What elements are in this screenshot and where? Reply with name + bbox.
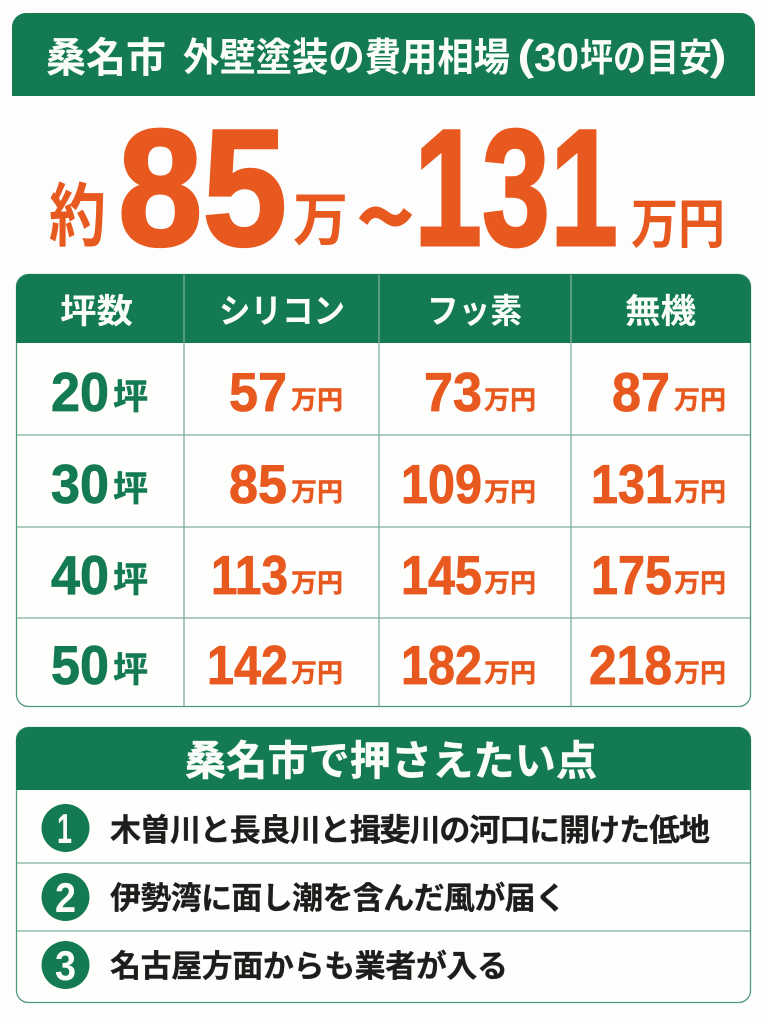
- row: 50坪: 142: [207, 634, 288, 696]
- row: 40坪: 万円: [674, 563, 726, 600]
- row: 40坪: [51, 544, 726, 606]
- price range headline: 万: [293, 173, 348, 257]
- row: 40坪: 40: [51, 544, 109, 606]
- title banner: [12, 13, 755, 96]
- row: 20坪: 57: [229, 361, 287, 423]
- price range headline: 約: [49, 160, 106, 260]
- row: 40坪: 145: [401, 544, 482, 606]
- row: 30坪: 85: [229, 453, 287, 515]
- row: 40坪: 万円: [291, 563, 343, 600]
- table header row: シリコン: [219, 284, 345, 333]
- row: 30坪: 万円: [484, 472, 536, 509]
- row: 20坪: 73: [424, 361, 482, 423]
- row: 40坪: 坪: [113, 552, 148, 603]
- row: 20坪: 万円: [484, 380, 536, 417]
- row: 20坪: 万円: [674, 380, 726, 417]
- row: 40坪: 113: [211, 544, 288, 606]
- row: 30坪: [51, 453, 726, 515]
- key points heading: [16, 727, 751, 790]
- point 2: 伊勢湾に面し潮を含んだ風が届く: [110, 873, 566, 918]
- point 1: 1: [57, 805, 72, 852]
- row: 30坪: 万円: [291, 472, 343, 509]
- row: 30坪: 131: [591, 453, 672, 515]
- row: 20坪: 20: [51, 361, 109, 423]
- price table: [16, 274, 751, 706]
- row: 30坪: 109: [401, 453, 482, 515]
- table header row: 無機: [625, 284, 696, 333]
- row: 30坪: 坪: [113, 461, 148, 512]
- table header row: フッ素: [427, 284, 522, 333]
- title text: ): [707, 27, 729, 83]
- point 3: 名古屋方面からも業者が入る: [110, 941, 508, 986]
- title text: [46, 24, 729, 84]
- title text: 坪の目安: [580, 27, 712, 82]
- table header row: [16, 274, 751, 343]
- row: 50坪: 万円: [291, 653, 343, 690]
- row: 20坪: [51, 361, 726, 423]
- title text: 30: [534, 36, 579, 80]
- price range headline: ~: [356, 138, 415, 283]
- price range headline: 85: [118, 96, 287, 281]
- row: 50坪: 万円: [484, 653, 536, 690]
- panel: key points: [16, 727, 751, 1002]
- row: 30坪: 万円: [674, 472, 726, 509]
- row: 50坪: 218: [589, 634, 672, 696]
- title text: (: [515, 27, 537, 83]
- row: 20坪: 万円: [291, 380, 343, 417]
- row: 50坪: 50: [51, 634, 109, 696]
- row: 50坪: [51, 634, 726, 696]
- point 1: 木曽川と長良川と揖斐川の河口に開けた低地: [110, 805, 710, 850]
- row: 40坪: 175: [591, 544, 672, 606]
- price range headline: 131: [414, 96, 618, 281]
- point 3: 3: [55, 942, 76, 989]
- table header row: 坪数: [60, 284, 133, 333]
- point 2: 2: [55, 874, 76, 921]
- key points heading: 桑名市で押さえたい点: [185, 727, 597, 787]
- row: 20坪: 87: [612, 361, 670, 423]
- row: 50坪: 万円: [674, 653, 726, 690]
- row: 30坪: 30: [51, 453, 109, 515]
- row: 40坪: 万円: [484, 563, 536, 600]
- title text: 外壁塗装の費用相場: [183, 27, 510, 83]
- price range headline: [49, 96, 725, 283]
- price range headline: 万円: [631, 180, 725, 259]
- title text: 桑名市: [46, 24, 166, 84]
- row: 20坪: 坪: [113, 369, 148, 420]
- row: 50坪: 182: [401, 634, 482, 696]
- row: 50坪: 坪: [113, 642, 148, 693]
